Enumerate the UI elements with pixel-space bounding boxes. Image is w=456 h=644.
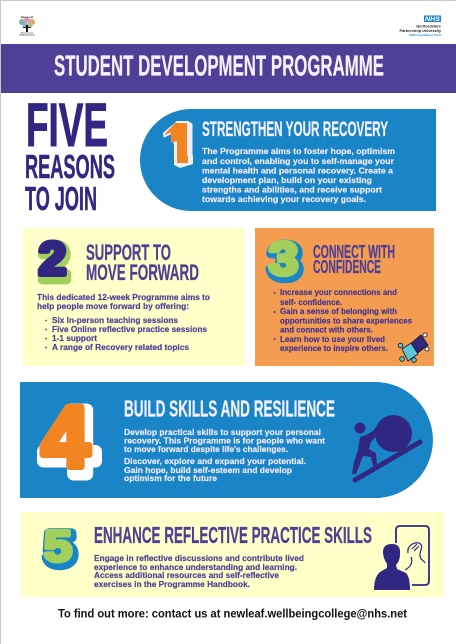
body 1: development plan, build on your existing xyxy=(202,175,372,185)
body 2: This dedicated 12-week Programme aims to xyxy=(37,292,210,302)
body 5: exercises in the Programme Handbook. xyxy=(94,579,250,589)
body 3: Gain a sense of belonging with xyxy=(280,306,397,316)
body 3: and connect with others. xyxy=(280,324,373,334)
heading: five reasons to join xyxy=(25,91,115,217)
icon: number 1 xyxy=(163,121,193,168)
icon: figure pushing boulder uphill xyxy=(352,415,420,480)
icon: number 5: 5 xyxy=(44,522,72,571)
logo: NHS Hertfordshire Partnership University: Partnership University xyxy=(399,28,442,33)
body 3: Learn how to use your lived xyxy=(280,334,385,344)
logo: New Leaf tree xyxy=(19,15,35,36)
body 5 xyxy=(94,553,304,589)
logo: NHS Hertfordshire Partnership University: NHS xyxy=(425,16,441,23)
logo: NHS Hertfordshire Partnership University: NHS Foundation Trust xyxy=(409,33,441,37)
title banner xyxy=(1,44,456,93)
heading 2 xyxy=(86,240,199,285)
body 1 xyxy=(202,146,395,204)
body 3: experience to inspire others. xyxy=(280,343,388,353)
icon: number 2: 2 xyxy=(41,235,68,291)
body 2: Six In-person teaching sessions xyxy=(52,315,178,325)
body 3: Increase your connections and xyxy=(280,287,397,297)
heading: five reasons to join: TO JOIN xyxy=(25,180,97,217)
panel 5: enhance reflective practice skills xyxy=(21,512,444,597)
body 4: optimism for the future xyxy=(124,473,217,483)
logo: New Leaf tree: Wellbeing College xyxy=(19,34,35,36)
icon: number 4: 4 xyxy=(42,390,90,486)
panel 3: connect with confidence xyxy=(255,228,434,366)
heading: five reasons to join: FIVE xyxy=(26,91,108,159)
body 3: self- confidence. xyxy=(280,297,342,307)
body 3: opportunities to share experiences xyxy=(280,316,412,326)
body 4 xyxy=(124,427,325,483)
footer contact line: To find out more: contact us at newleaf.wellbeingcollege@nhs.net xyxy=(58,608,407,620)
body 2: 1-1 support xyxy=(52,333,97,343)
body 4: Develop practical skills to support your personal xyxy=(124,427,321,437)
heading 3: CONFIDENCE xyxy=(313,257,381,277)
heading 2: MOVE FORWARD xyxy=(86,260,199,285)
body 1: towards achieving your recovery goals. xyxy=(202,194,366,204)
body 5: Engage in reflective discussions and contribute lived xyxy=(94,553,304,563)
icon: number 4: 4 xyxy=(42,391,96,495)
body 4: Discover, explore and expand your potential. xyxy=(124,456,306,466)
body 3 xyxy=(274,287,412,353)
icon: number 3: 3 xyxy=(269,233,298,285)
panel 2: support to move forward xyxy=(23,228,245,366)
logo: New Leaf tree: Recovery and xyxy=(21,32,33,34)
icon: number 2: 2 xyxy=(39,234,66,285)
heading 3 xyxy=(313,242,395,277)
icon: number 3: 3 xyxy=(270,234,300,288)
panel 4: build skills and resilience xyxy=(20,382,433,498)
icon: number 1: 1 xyxy=(154,110,200,176)
logo: NHS Hertfordshire Partnership University xyxy=(399,16,442,37)
logo: NHS Hertfordshire Partnership University: Hertfordshire xyxy=(416,24,442,28)
body 1: The Programme aims to foster hope, optimism xyxy=(202,146,395,156)
body 1: strengths and abilities, and receive support xyxy=(202,184,382,194)
body 1: mental health and personal recovery. Create a xyxy=(202,166,393,176)
heading 3: CONNECT WITH xyxy=(313,242,395,262)
icon: puzzle pieces xyxy=(398,333,429,362)
icon: number 5: 5 xyxy=(45,523,75,575)
body 4: Gain hope, build self-esteem and develop xyxy=(124,465,292,475)
logo: New Leaf tree: New Leaf xyxy=(21,15,33,19)
body 4: to move forward despite life's challenges. xyxy=(124,444,288,454)
body 2: Five Online reflective practice sessions xyxy=(52,324,207,334)
body 4: recovery. This Programme is for people who want xyxy=(124,436,325,446)
body 2: A range of Recovery related topics xyxy=(52,342,189,352)
body 1: and control, enabling you to self-manage your xyxy=(202,156,395,166)
icon: person looking in mirror xyxy=(374,526,429,590)
body 2 xyxy=(37,292,210,352)
body 5: experience to enhance understanding and learning. xyxy=(94,562,297,572)
panel 1: strengthen your recovery xyxy=(140,106,436,211)
icon: number 1: 1 xyxy=(158,106,204,179)
heading: five reasons to join: REASONS xyxy=(25,148,115,185)
heading 2: SUPPORT TO xyxy=(86,240,171,265)
body 5: Access additional resources and self-reflective xyxy=(94,570,279,580)
body 2: help people move forward by offering: xyxy=(37,301,189,311)
